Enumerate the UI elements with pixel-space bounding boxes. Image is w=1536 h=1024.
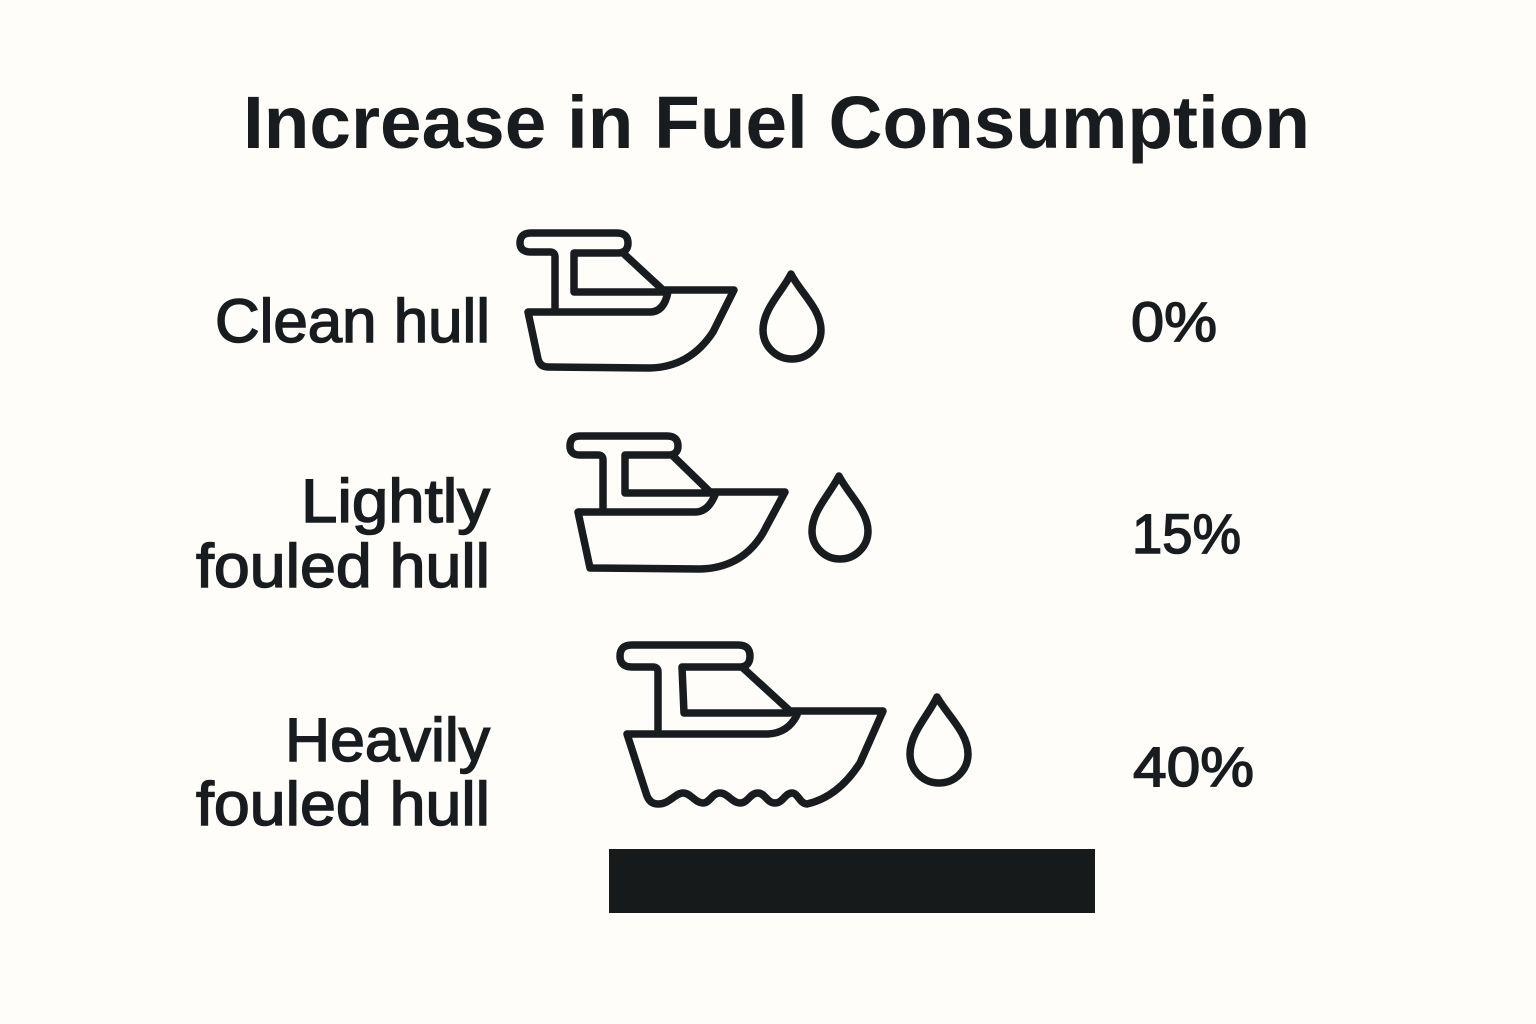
label: lightly fouled hull (196, 467, 491, 600)
label: clean hull: Clean hull (215, 287, 490, 355)
title: Increase in Fuel Consumption (243, 81, 1310, 164)
label: lightly fouled hull: fouled hull (196, 532, 490, 600)
row: lightly fouled hull (196, 436, 1241, 600)
solid black bar (609, 849, 1095, 913)
icon: fuel drop (910, 697, 968, 783)
value: 15%: 15% (1132, 502, 1241, 565)
label: lightly fouled hull: Lightly (301, 467, 491, 535)
label: heavily fouled hull (196, 706, 491, 838)
row: heavily fouled hull (196, 645, 1254, 838)
icon: clean boat (520, 233, 734, 368)
icon: fuel drop (763, 274, 821, 359)
value: 40%: 40% (1133, 735, 1254, 798)
value: 0%: 0% (1131, 290, 1217, 353)
row: clean hull (215, 233, 1217, 368)
icon: lightly fouled boat (570, 436, 785, 569)
icon: fuel drop (812, 476, 868, 559)
label: heavily fouled hull: fouled hull (196, 770, 490, 838)
icon: heavily fouled boat (620, 645, 883, 804)
label: heavily fouled hull: Heavily (285, 706, 491, 774)
